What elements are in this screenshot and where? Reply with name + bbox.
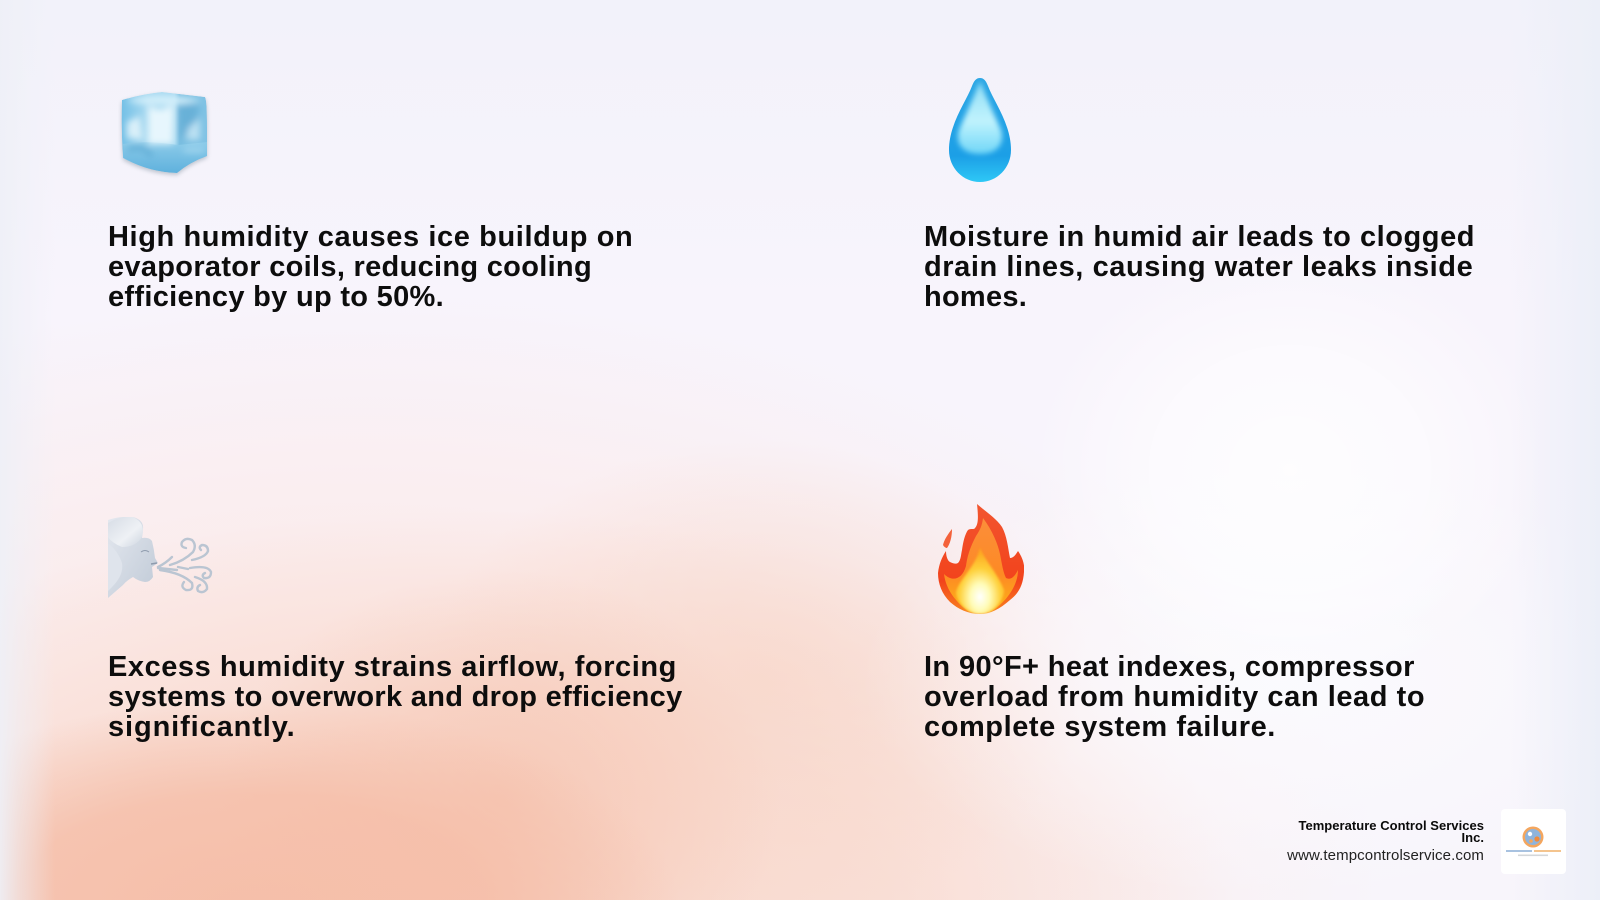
company name xyxy=(1298,818,1484,845)
logo xyxy=(1501,809,1566,874)
panel: airflow strain xyxy=(108,517,683,743)
text: clogged drain xyxy=(924,221,1475,313)
text: compressor overload xyxy=(924,651,1425,743)
text: ice buildup: High humidity causes ice buildup on xyxy=(108,221,633,253)
icon: wind face xyxy=(108,517,212,598)
panel: clogged drain xyxy=(924,78,1475,313)
text: airflow strain xyxy=(108,651,683,743)
text: compressor overload: complete system failure. xyxy=(924,711,1276,743)
text: ice buildup: efficiency by up to 50%. xyxy=(108,281,444,313)
text: clogged drain: Moisture in humid air leads to clogged xyxy=(924,221,1475,253)
text: ice buildup xyxy=(108,221,633,313)
company name: Temperature Control Services xyxy=(1298,818,1484,833)
text: compressor overload: In 90°F+ heat indexes, compressor xyxy=(924,651,1415,683)
text: clogged drain: drain lines, causing water leaks inside xyxy=(924,251,1473,283)
text: clogged drain: homes. xyxy=(924,281,1027,313)
company name: Inc. xyxy=(1461,830,1484,845)
website: www.tempcontrolservice.com xyxy=(1287,847,1484,864)
text: airflow strain: significantly. xyxy=(108,711,296,743)
text: compressor overload: overload from humidity can lead to xyxy=(924,681,1425,713)
panel: compressor overload xyxy=(924,504,1425,743)
icon: water drop xyxy=(949,78,1011,182)
text: airflow strain: Excess humidity strains airflow, forcing xyxy=(108,651,677,683)
panel: ice buildup xyxy=(108,92,633,313)
icon: ice cube xyxy=(120,92,210,177)
text: airflow strain: systems to overwork and drop efficiency xyxy=(108,681,683,713)
text: ice buildup: evaporator coils, reducing cooling xyxy=(108,251,592,283)
footer: company branding xyxy=(1287,809,1566,874)
icon: fire xyxy=(938,504,1024,614)
